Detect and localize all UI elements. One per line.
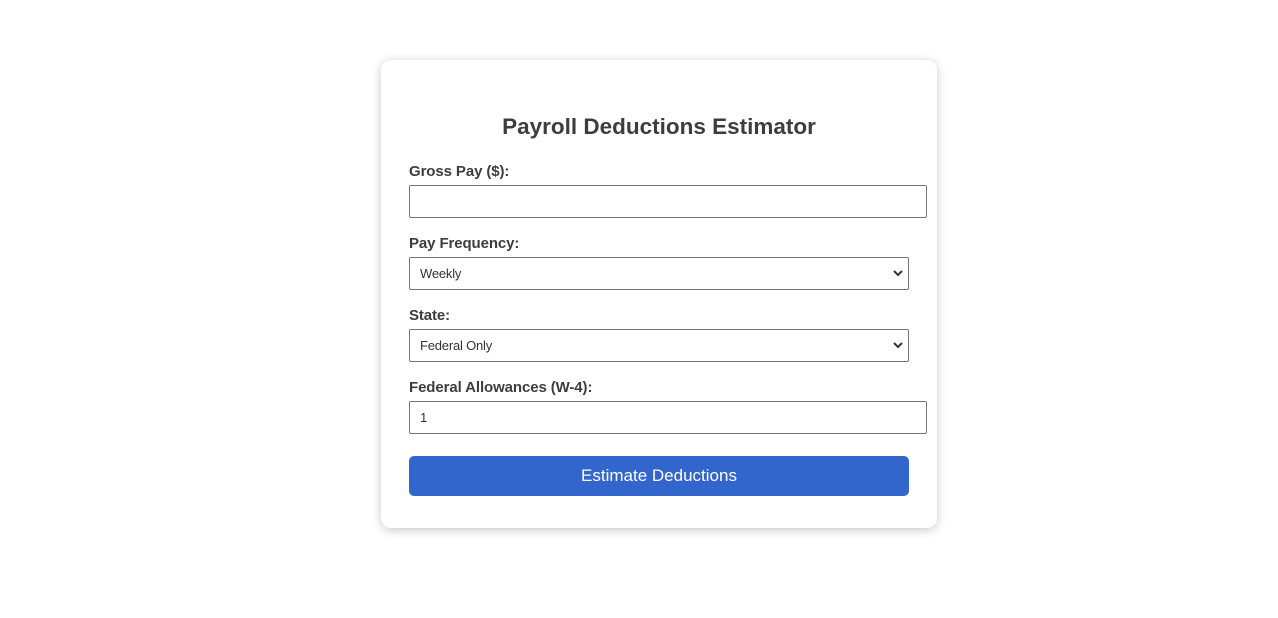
select: pay frequency: Weekly <box>420 266 461 281</box>
input: gross pay <box>409 185 927 218</box>
label: pay frequency: Pay Frequency: <box>409 235 519 252</box>
select: state: Federal Only <box>420 338 492 353</box>
button: estimate <box>409 456 909 496</box>
input: allowances: 1 <box>420 410 427 425</box>
label: state: State: <box>409 307 450 324</box>
select: state <box>409 329 909 362</box>
label: gross pay: Gross Pay ($): <box>409 163 509 180</box>
panel: form card <box>381 60 937 528</box>
label: federal allowances: Federal Allowances (W-4): <box>409 379 592 396</box>
select: pay frequency <box>409 257 909 290</box>
button: estimate: Estimate Deductions <box>581 466 737 485</box>
input: allowances <box>409 401 927 434</box>
title: Payroll Deductions Estimator <box>502 114 816 139</box>
